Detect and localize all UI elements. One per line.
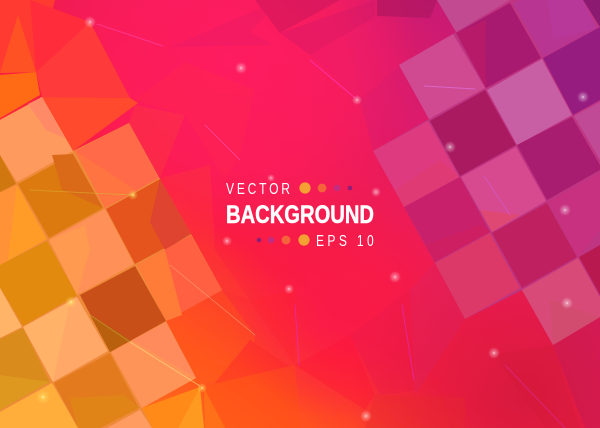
bottom dots row: [257, 234, 310, 246]
top dots row: [299, 182, 352, 194]
heading: VECTOR: VECTOR: [226, 180, 290, 197]
panel: right checker tiles: [373, 0, 600, 345]
heading: BACKGROUND: BACKGROUND: [226, 201, 374, 229]
subheading: EPS 10: EPS 10: [316, 232, 374, 249]
title block: [226, 180, 374, 249]
panel: left checker tiles: [0, 97, 222, 428]
